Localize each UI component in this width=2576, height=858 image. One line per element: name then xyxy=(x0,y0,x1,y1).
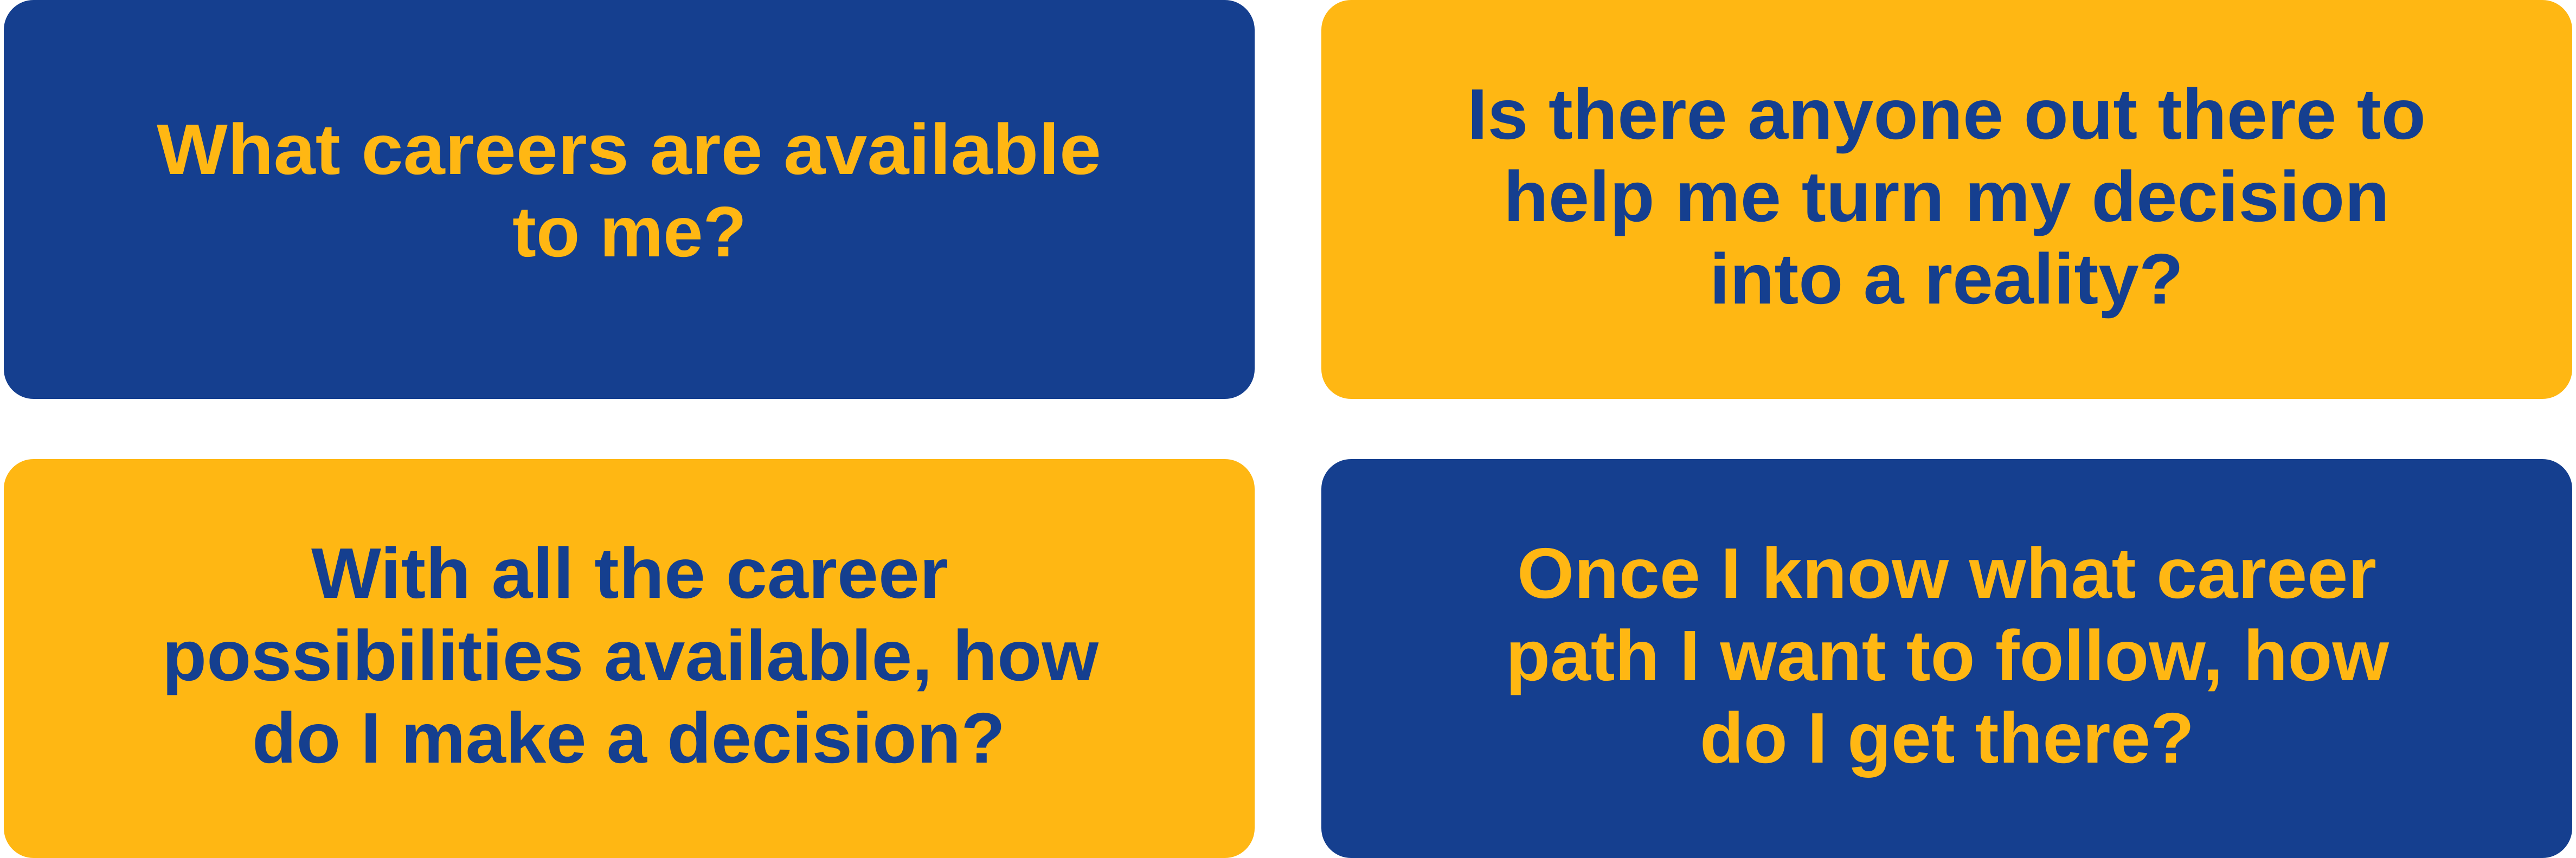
question text: how do I get there: path I want to follow, how xyxy=(1506,616,2389,695)
question text: how do I get there: do I get there? xyxy=(1700,698,2194,778)
panel: what careers are available xyxy=(4,0,1255,399)
panel: how do I get there xyxy=(1321,459,2572,858)
panel: anyone to help with my decision xyxy=(1321,0,2572,399)
question text: anyone to help with my decision: into a reality? xyxy=(1710,239,2183,319)
question text: how do I make a decision: possibilities available, how xyxy=(162,616,1099,695)
question text: how do I make a decision xyxy=(162,533,1099,778)
question text: how do I make a decision: do I make a decision? xyxy=(252,698,1005,778)
question text: what careers are available: to me? xyxy=(512,192,747,272)
question text: how do I make a decision: With all the career xyxy=(311,533,948,613)
question text: anyone to help with my decision xyxy=(1467,74,2426,319)
question text: how do I get there xyxy=(1506,533,2389,778)
question text: what careers are available xyxy=(157,109,1101,272)
question text: how do I get there: Once I know what career xyxy=(1517,533,2376,613)
question text: what careers are available: What careers are available xyxy=(157,109,1101,189)
question text: anyone to help with my decision: help me turn my decision xyxy=(1504,157,2389,236)
panel: how do I make a decision xyxy=(4,459,1255,858)
question text: anyone to help with my decision: Is there anyone out there to xyxy=(1467,74,2426,154)
